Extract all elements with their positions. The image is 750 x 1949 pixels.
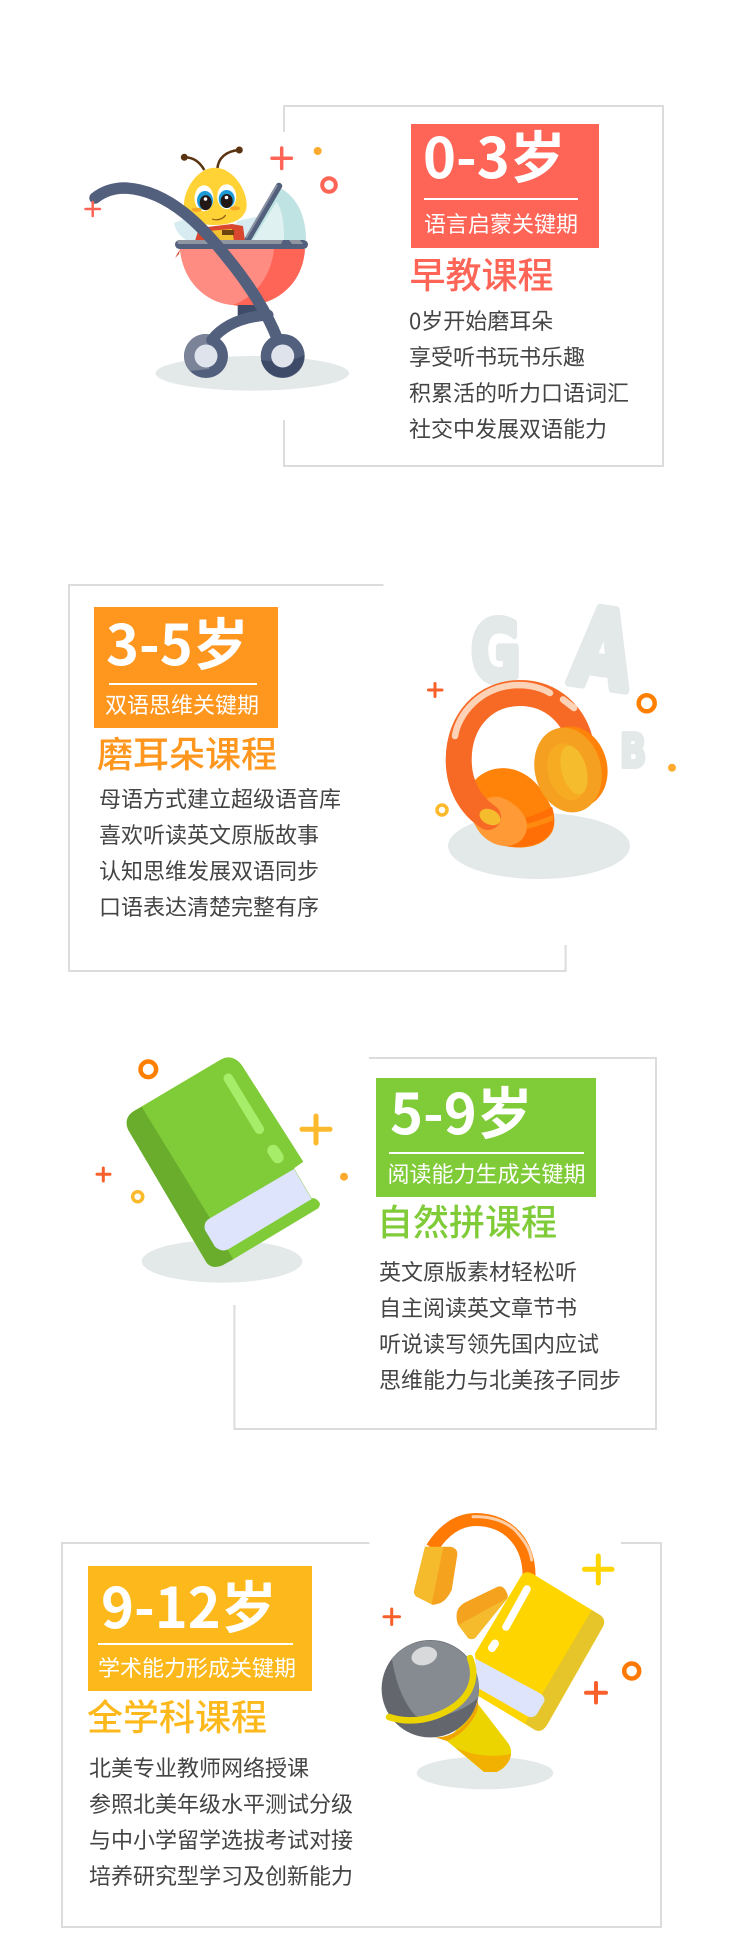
course heading: 全学科课程: [87, 1689, 267, 1741]
age badge: 9-12岁: [101, 1564, 277, 1645]
age badge: 0-3岁: [423, 114, 566, 195]
course bullet list: 培养研究型学习及创新能力: [89, 1859, 353, 1891]
course bullet list: 积累活的听力口语词汇: [409, 376, 629, 408]
panel frame: [69, 585, 566, 971]
age badge: [376, 1070, 596, 1197]
age badge: [94, 601, 278, 728]
course bullet list: [99, 782, 341, 922]
illustration: headphones with letters: [428, 584, 676, 879]
panel frame: [284, 106, 663, 466]
panel: 0-3 early education: [84, 105, 664, 467]
age badge: [88, 1564, 312, 1691]
panel: 3-5 ear training: [68, 584, 676, 972]
illustration: headphones with letters: G: [471, 604, 521, 702]
age badge: 阅读能力生成关键期: [388, 1157, 586, 1189]
course heading: 磨耳朵课程: [97, 726, 277, 778]
course bullet list: 母语方式建立超级语音库: [99, 782, 341, 814]
age badge: 学术能力形成关键期: [98, 1651, 296, 1683]
course bullet list: 享受听书玩书乐趣: [409, 340, 585, 372]
panel frame: [234, 1058, 656, 1429]
course bullet list: 口语表达清楚完整有序: [99, 890, 319, 922]
illustration: bee in stroller: [86, 146, 349, 391]
course bullet list: 0岁开始磨耳朵: [409, 304, 553, 336]
course bullet list: [379, 1255, 621, 1395]
course bullet list: [409, 304, 629, 444]
course bullet list: 英文原版素材轻松听: [379, 1255, 577, 1287]
course heading: 早教课程: [410, 247, 554, 299]
illustration: green book: [97, 1057, 348, 1283]
course bullet list: 社交中发展双语能力: [409, 412, 607, 444]
age badge: 3-5岁: [106, 601, 249, 682]
course bullet list: 与中小学留学选拔考试对接: [89, 1823, 353, 1855]
age badge: 语言启蒙关键期: [424, 207, 578, 239]
course bullet list: 北美专业教师网络授课: [89, 1751, 309, 1783]
illustration: microphone, book and headphones: [382, 1517, 639, 1789]
panel frame: [62, 1543, 661, 1927]
panel: 5-9 phonics: [96, 1057, 657, 1430]
illustration: headphones with letters: A: [564, 584, 641, 715]
age badge: 5-9岁: [390, 1070, 533, 1151]
course bullet list: 参照北美年级水平测试分级: [89, 1787, 353, 1819]
course bullet list: 认知思维发展双语同步: [99, 854, 319, 886]
illustration: headphones with letters: B: [620, 724, 646, 778]
course bullet list: 自主阅读英文章节书: [379, 1291, 577, 1323]
course heading: 自然拼课程: [377, 1194, 557, 1246]
age badge: [411, 114, 599, 248]
course bullet list: [89, 1751, 353, 1891]
panel: 9-12 full curriculum: [61, 1513, 662, 1928]
course bullet list: 思维能力与北美孩子同步: [379, 1363, 621, 1395]
age badge: 双语思维关键期: [105, 688, 259, 720]
course bullet list: 喜欢听读英文原版故事: [99, 818, 319, 850]
course bullet list: 听说读写领先国内应试: [379, 1327, 599, 1359]
